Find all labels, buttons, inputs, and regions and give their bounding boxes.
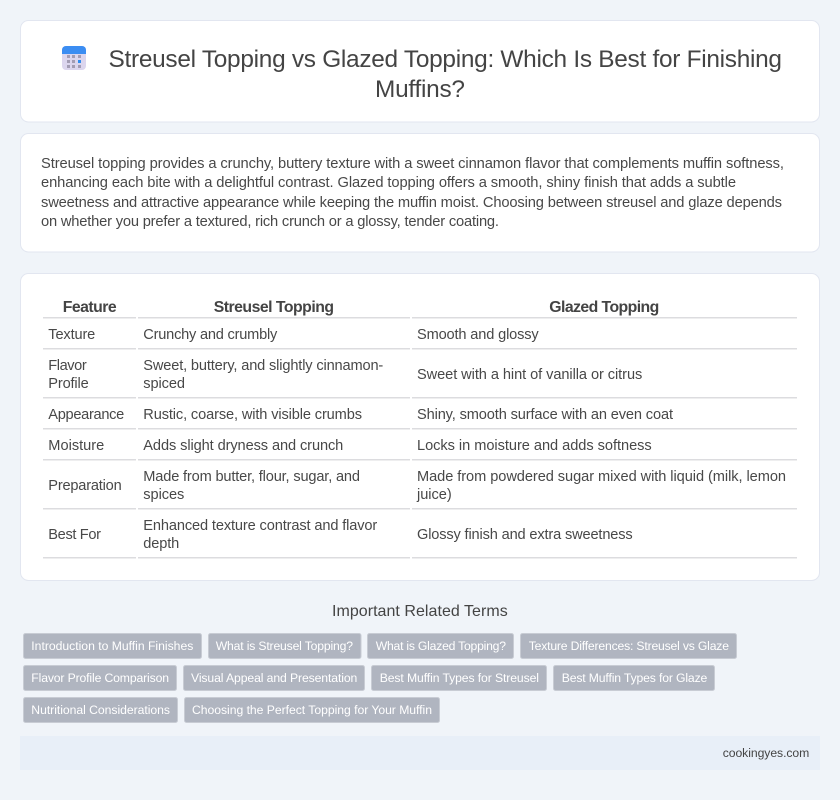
panel: header bbox=[20, 20, 820, 122]
row: moisture: Adds slight dryness and crunch bbox=[143, 438, 343, 454]
chip: Nutritional Considerations bbox=[31, 703, 170, 717]
row: flavor profile: Profile bbox=[48, 376, 89, 392]
chip: What is Streusel Topping? bbox=[216, 639, 353, 653]
icon: calendar grid bbox=[62, 46, 86, 70]
row: preparation: Preparation bbox=[48, 478, 122, 494]
row: preparation: Made from powdered sugar mixed with liquid (milk, lemon bbox=[417, 469, 786, 485]
row: moisture: Locks in moisture and adds softness bbox=[417, 438, 652, 454]
chip bbox=[208, 634, 361, 658]
chip bbox=[184, 666, 364, 690]
panel: intro paragraph bbox=[20, 134, 820, 252]
chip bbox=[184, 698, 440, 722]
row: texture: Smooth and glossy bbox=[417, 327, 539, 343]
chip: Introduction to Muffin Finishes bbox=[31, 639, 193, 653]
panel: comparison table bbox=[20, 274, 820, 580]
row: preparation bbox=[48, 469, 786, 503]
row: appearance: Appearance bbox=[48, 407, 124, 423]
title: Streusel Topping vs Glazed Topping: Which Is Best for Finishing bbox=[108, 46, 782, 73]
row: flavor profile bbox=[48, 358, 642, 392]
related terms chips bbox=[24, 634, 736, 722]
chip bbox=[368, 634, 514, 658]
chip: Best Muffin Types for Glaze bbox=[562, 671, 708, 685]
text block: description: enhancing each bite with a delightful contrast. Glazed topping offers a smooth, shiny finish that adds a subtle bbox=[41, 175, 736, 191]
row: best for: Enhanced texture contrast and flavor bbox=[143, 518, 377, 534]
row: preparation: juice) bbox=[416, 487, 452, 503]
row: appearance: Rustic, coarse, with visible crumbs bbox=[143, 407, 362, 423]
chip bbox=[372, 666, 546, 690]
text block: description: sweetness and attractive appearance while keeping the muffin moist. Choosing between streusel and glaze depends bbox=[41, 195, 782, 211]
chip: Choosing the Perfect Topping for Your Muffin bbox=[192, 703, 432, 717]
row: texture: Crunchy and crumbly bbox=[143, 327, 278, 343]
row: moisture: Moisture bbox=[48, 438, 104, 454]
text block: description bbox=[41, 156, 784, 230]
heading: important related terms: Important Related Terms bbox=[332, 603, 508, 620]
row: flavor profile: Flavor bbox=[48, 358, 87, 374]
row: texture bbox=[48, 327, 539, 343]
row: appearance bbox=[48, 407, 673, 423]
footer bbox=[20, 736, 820, 770]
row: best for: Glossy finish and extra sweetness bbox=[417, 527, 633, 543]
chip: Visual Appeal and Presentation bbox=[191, 671, 357, 685]
table header: Streusel Topping bbox=[214, 299, 334, 316]
row: flavor profile: Sweet with a hint of vanilla or citrus bbox=[417, 367, 642, 383]
text block: description: on whether you prefer a textured, rich crunch or a glossy, tender coating. bbox=[41, 214, 499, 230]
chip bbox=[554, 666, 714, 690]
row: best for: Best For bbox=[48, 527, 101, 543]
row: flavor profile: Sweet, buttery, and slightly cinnamon- bbox=[143, 358, 383, 374]
chip bbox=[24, 634, 202, 658]
row: preparation: spices bbox=[143, 487, 184, 503]
text block: description: Streusel topping provides a crunchy, buttery texture with a sweet cinnamon flavor that complements muffin softness, bbox=[41, 156, 784, 172]
row: best for bbox=[48, 518, 633, 552]
row: texture: Texture bbox=[48, 327, 95, 343]
chip bbox=[520, 634, 736, 658]
chip: Flavor Profile Comparison bbox=[31, 671, 169, 685]
table header: Feature bbox=[63, 299, 117, 316]
table header: Glazed Topping bbox=[549, 299, 659, 316]
chip bbox=[24, 698, 178, 722]
row: preparation: Made from butter, flour, sugar, and bbox=[143, 469, 360, 485]
row: best for: depth bbox=[143, 536, 179, 552]
title bbox=[108, 46, 782, 103]
chip: Best Muffin Types for Streusel bbox=[380, 671, 539, 685]
footer: cookingyes.com bbox=[723, 746, 809, 760]
title: Muffins? bbox=[375, 76, 465, 103]
chip bbox=[24, 666, 176, 690]
row: flavor profile: spiced bbox=[143, 376, 185, 392]
chip: Texture Differences: Streusel vs Glaze bbox=[529, 639, 729, 653]
table header bbox=[63, 299, 659, 316]
row: moisture bbox=[48, 438, 652, 454]
row: appearance: Shiny, smooth surface with an even coat bbox=[417, 407, 673, 423]
chip: What is Glazed Topping? bbox=[376, 639, 506, 653]
